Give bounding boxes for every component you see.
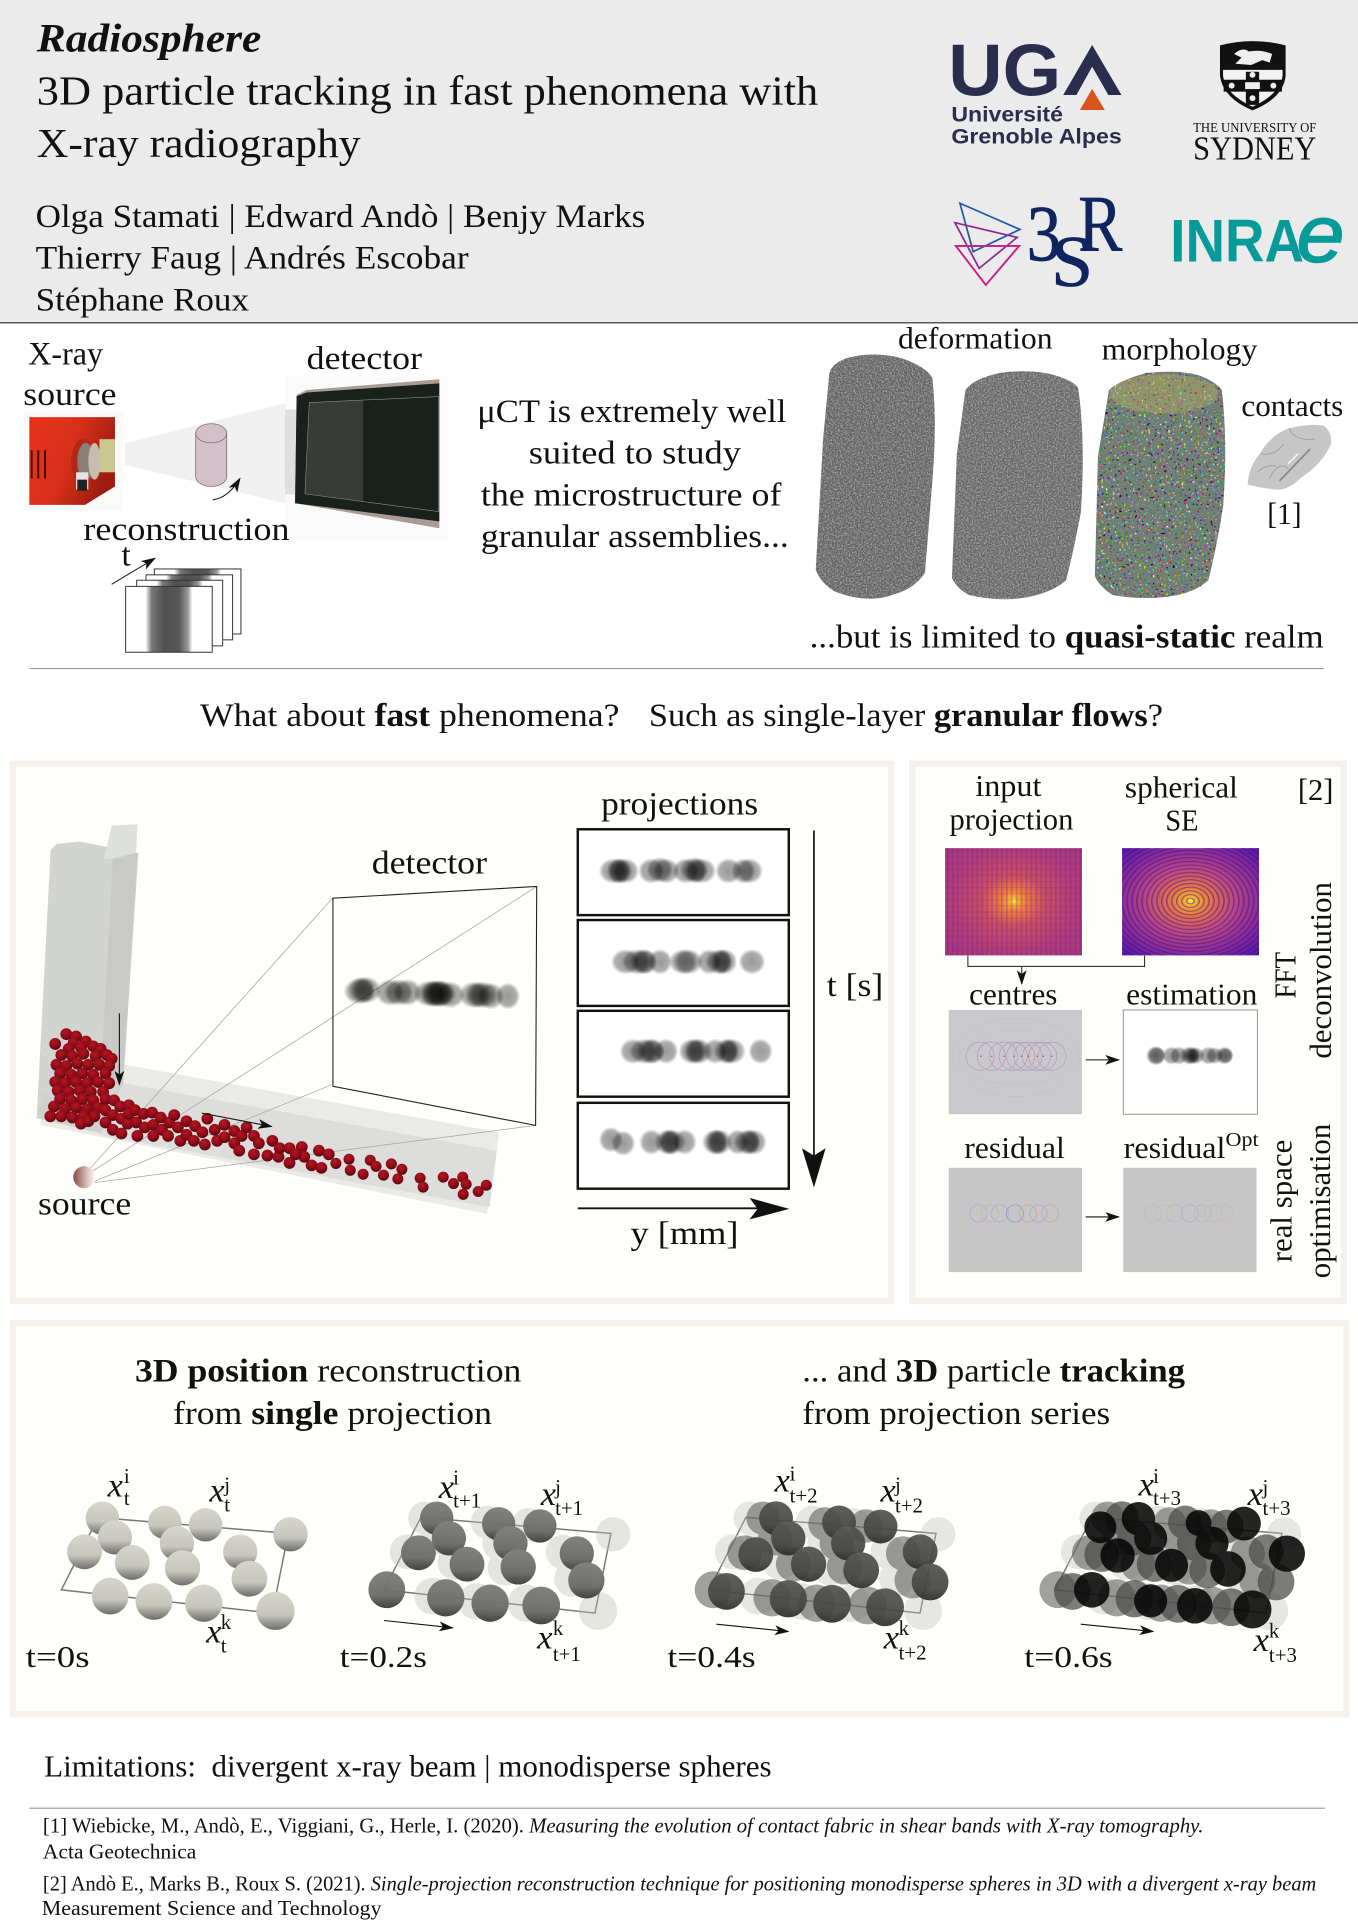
labels: x t+1: t+1	[453, 1489, 481, 1513]
rotation arrow	[213, 478, 240, 500]
label: optimisation: optimisation	[1303, 1124, 1337, 1278]
label: real space: real space	[1265, 1140, 1299, 1262]
logo: 3SR: S	[1051, 220, 1093, 302]
sample cylinder 3: coloured grains	[1095, 372, 1225, 598]
labels: x t: x	[205, 1613, 221, 1651]
caption: quasi-static: ...but is limited to quasi-static realm	[810, 619, 1324, 656]
beam cone	[125, 403, 285, 503]
labels: x t+2: t+2	[790, 1484, 818, 1508]
icon: X-ray source	[23, 412, 123, 510]
header band	[0, 0, 1358, 323]
snapshot t=0s	[26, 1464, 308, 1674]
labels: x t+1: t+1	[553, 1642, 581, 1666]
question: granular flows: Such as single-layer granular flows ?	[649, 697, 1163, 734]
flume	[37, 824, 499, 1214]
label: t=0.2s: t=0.2s	[340, 1640, 427, 1674]
arrow	[384, 1620, 453, 1628]
label: morphology: morphology	[1102, 332, 1258, 366]
heading: 3D position reconstruction: 3D position reconstruction	[135, 1352, 522, 1389]
labels: x t+1: i	[453, 1465, 459, 1489]
label: X-ray source	[23, 335, 117, 413]
reference 2	[42, 1871, 1316, 1920]
sample cylinder 1	[816, 355, 935, 599]
label: estimation: estimation	[1126, 978, 1257, 1012]
labels: x t+3: x	[1138, 1465, 1154, 1503]
labels: x t	[107, 1464, 232, 1657]
reference 1: [1] Wiebicke, M., Andò, E., Viggiani, G., Herle, I. (2020). Measuring the evolution of contact fabric in shear bands with X-ray tomography.	[43, 1814, 1203, 1838]
label: residual Opt: Opt	[1226, 1130, 1259, 1151]
residual optimised image	[1123, 1168, 1257, 1272]
CT setup diagram	[23, 335, 448, 652]
label: t=0.4s: t=0.4s	[667, 1640, 756, 1674]
question: fast phenomena: What about fast phenomena?	[200, 697, 620, 734]
label: X-ray source: source	[23, 376, 117, 413]
labels: x t+3: x	[1247, 1475, 1263, 1513]
labels: x t+3: t+3	[1269, 1643, 1297, 1667]
logo: 3SR: R	[1078, 178, 1122, 268]
flow arrows	[119, 1013, 272, 1126]
estimation image	[1123, 1010, 1257, 1114]
reference 1: Acta Geotechnica	[43, 1839, 196, 1863]
authors: Thierry Faug | Andrés Escobar	[36, 240, 469, 277]
text: microCT intro: granular assemblies...	[481, 518, 789, 555]
label: detector: detector	[307, 340, 422, 377]
label: detector: detector	[372, 844, 487, 881]
arrow	[1081, 1624, 1153, 1632]
projection frame 4	[578, 1103, 789, 1189]
labels: x t: t	[224, 1492, 230, 1516]
connector arrow	[968, 956, 1145, 984]
labels: x t+1: x	[540, 1475, 556, 1513]
heading: 3D position reconstruction: from single projection	[173, 1395, 492, 1432]
labels: x t+2: x	[774, 1462, 790, 1500]
arrow	[1086, 1059, 1119, 1061]
icon: sample cylinder	[196, 424, 227, 486]
labels: x t+1: j	[554, 1475, 561, 1499]
centres image	[949, 1010, 1082, 1114]
logo: 3SR	[955, 178, 1122, 302]
logo: Université Grenoble Alpes	[948, 29, 1122, 149]
label: residual Opt	[1124, 1130, 1259, 1165]
label: centres: centres	[969, 978, 1057, 1012]
arrow: time axis	[802, 830, 826, 1187]
projection stack	[126, 569, 241, 652]
FFT of spherical SE	[1122, 848, 1259, 955]
label: input projection: projection	[949, 802, 1073, 836]
labels: x t+2: j	[894, 1473, 901, 1497]
logo: Université Grenoble Alpes: Grenoble Alpes	[951, 126, 1122, 149]
label: projections: projections	[601, 786, 758, 823]
black spheres	[1074, 1502, 1305, 1628]
labels: x t: t	[124, 1486, 130, 1510]
logo: Université Grenoble Alpes: UG	[948, 29, 1061, 112]
authors	[36, 198, 645, 318]
label: source: source	[38, 1185, 131, 1222]
panel: flow experiment	[13, 764, 891, 1301]
authors: Olga Stamati | Edward Andò | Benjy Marks	[36, 198, 645, 235]
beam rays	[90, 886, 537, 1183]
label: t: t	[121, 537, 131, 574]
panel: reconstruction and tracking	[13, 1323, 1346, 1714]
label: t [s]: t [s]	[827, 967, 883, 1004]
snapshot t=0.6s	[1024, 1464, 1305, 1674]
FFT of input projection	[945, 848, 1082, 955]
labels: x t: i	[124, 1464, 130, 1488]
arrow	[1086, 1216, 1119, 1218]
labels: x t+3: t+3	[1263, 1496, 1291, 1520]
text: microCT intro: μCT is extremely well	[477, 393, 786, 430]
time arrow	[112, 558, 155, 584]
labels: x t+2: k	[899, 1616, 910, 1640]
labels: x t+1	[438, 1465, 583, 1666]
sample cylinder 2	[952, 371, 1083, 599]
labels: x t+1: t+1	[555, 1496, 583, 1520]
snapshot t=0.4s	[667, 1462, 955, 1674]
heading: 3D particle tracking	[802, 1352, 1185, 1432]
reference 2: Measurement Science and Technology	[42, 1896, 382, 1920]
reference 2: [2] Andò E., Marks B., Roux S. (2021). Single-projection reconstruction technique for positioning monodisperse spheres in 3D with a divergent x-ray beam	[43, 1871, 1316, 1895]
labels: x t+3: k	[1269, 1619, 1280, 1643]
logo: INRAE: INRA	[1170, 207, 1304, 274]
authors: Stéphane Roux	[36, 281, 250, 318]
label: input projection	[949, 769, 1073, 836]
title: Radiosphere	[36, 16, 261, 61]
label: spherical SE: spherical	[1125, 770, 1238, 804]
icon: detector photo	[285, 377, 448, 540]
arrow: y axis	[578, 1198, 789, 1219]
detector plane	[333, 886, 537, 1125]
text: microCT intro: suited to study	[529, 435, 741, 472]
labels: x t+2: t+2	[895, 1494, 923, 1518]
labels: x t+3: x	[1253, 1621, 1269, 1659]
labels: x t+1: x	[438, 1468, 454, 1506]
label: FFT: FFT	[1268, 952, 1302, 999]
panel: deconvolution	[912, 764, 1344, 1301]
labels: x t+3: t+3	[1153, 1486, 1181, 1510]
labels: x t: j	[223, 1473, 230, 1497]
label: t=0.6s: t=0.6s	[1024, 1640, 1113, 1674]
heading: 3D particle tracking: from projection series	[802, 1395, 1110, 1432]
logo: University of Sydney	[1193, 41, 1317, 167]
labels: x t+1: x	[536, 1619, 553, 1657]
text: microCT intro: the microstructure of	[481, 476, 782, 513]
residual image	[949, 1168, 1082, 1272]
projection frame 1	[578, 829, 789, 915]
arrow	[716, 1624, 788, 1632]
labels: x t+3	[1138, 1464, 1297, 1667]
title	[36, 16, 818, 167]
grain samples	[810, 321, 1343, 656]
labels: x t+1: k	[553, 1616, 564, 1640]
labels: x t: x	[208, 1472, 225, 1510]
label: reconstruction: reconstruction	[83, 511, 290, 548]
labels: x t: x	[107, 1467, 123, 1505]
title: X-ray radiography	[37, 121, 361, 167]
logo: INRAE	[1170, 189, 1344, 279]
labels: x t+3: j	[1262, 1475, 1268, 1499]
heading: 3D particle tracking: ... and 3D particle tracking	[802, 1352, 1185, 1389]
snapshot t=0.2s	[340, 1465, 630, 1674]
text: microCT intro	[477, 393, 789, 555]
icon: point source	[73, 1166, 95, 1188]
title: 3D particle tracking in fast phenomena with	[37, 68, 818, 114]
projection frame 3	[578, 1011, 789, 1097]
label: t=0s: t=0s	[26, 1640, 90, 1674]
citation 2: [2]	[1298, 773, 1333, 807]
label: X-ray source: X-ray	[28, 335, 103, 372]
label: input projection: input	[975, 769, 1042, 803]
logo: University of Sydney: SYDNEY	[1193, 129, 1316, 167]
labels: x t+2: i	[790, 1462, 796, 1486]
reference 1	[43, 1814, 1203, 1863]
labels: x t+3: i	[1153, 1464, 1159, 1488]
label: residual Opt: residual	[1124, 1131, 1226, 1165]
references	[42, 1814, 1316, 1920]
label: deconvolution: deconvolution	[1304, 882, 1338, 1059]
label: residual: residual	[964, 1131, 1065, 1165]
projection frame 2	[578, 920, 789, 1006]
labels: x t+2	[774, 1462, 927, 1665]
label: spherical SE	[1125, 770, 1238, 837]
labels: x t: t	[221, 1633, 227, 1657]
logo: University of Sydney: THE UNIVERSITY OF	[1193, 120, 1317, 136]
contact grain	[1248, 425, 1331, 490]
labels: x t+2: x	[883, 1619, 899, 1657]
limitations: Limitations: divergent x-ray beam | monodisperse spheres	[44, 1749, 772, 1783]
label: contacts: contacts	[1241, 389, 1343, 423]
logo: 3SR: 3	[1027, 190, 1061, 278]
heading: 3D position reconstruction	[135, 1352, 522, 1432]
logo: Université Grenoble Alpes: Université	[951, 103, 1063, 126]
labels: x t+2: x	[880, 1472, 896, 1510]
citation 1: [1]	[1267, 497, 1302, 531]
label: deformation: deformation	[898, 321, 1053, 355]
particles	[44, 1028, 492, 1200]
label: y [mm]: y [mm]	[631, 1215, 738, 1252]
logo: INRAE: e	[1297, 189, 1344, 279]
labels: x t+2: t+2	[899, 1641, 927, 1665]
label: spherical SE: SE	[1165, 803, 1199, 837]
labels: x t: k	[221, 1610, 232, 1634]
